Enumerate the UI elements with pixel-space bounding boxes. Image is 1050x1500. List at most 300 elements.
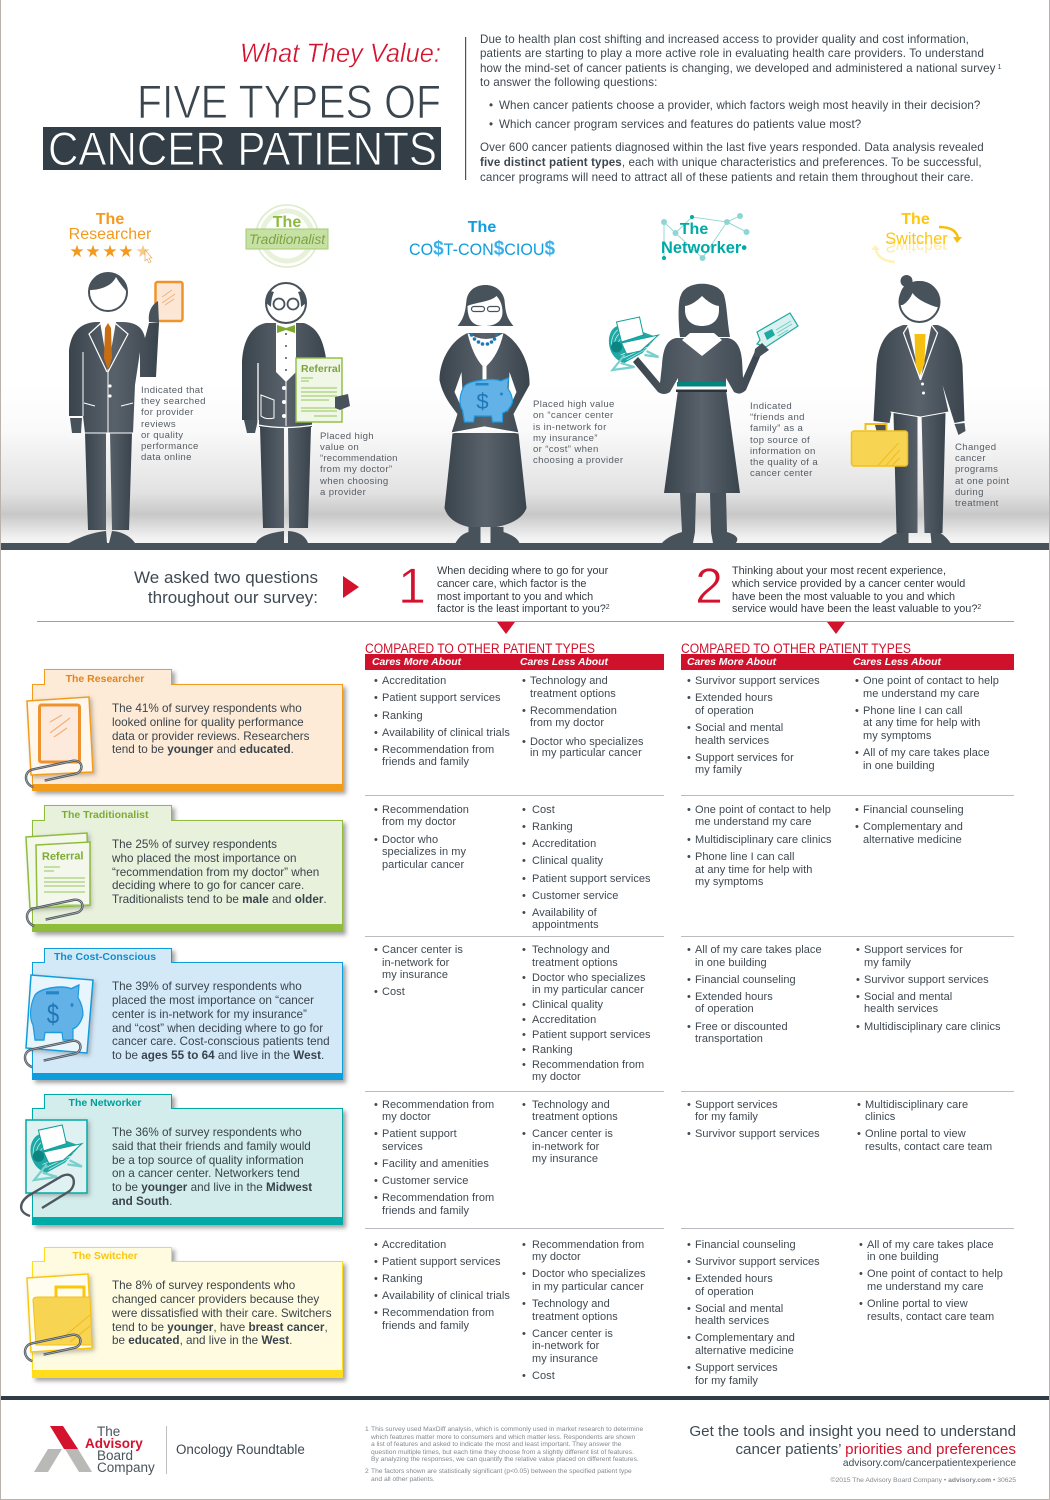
call to action: ©2015 The Advisory Board Company • advisory.com • 30625 (831, 1476, 1016, 1484)
list: switcher q2 less: • (859, 1239, 863, 1251)
intro text: five distinct patient types, each with unique characteristics and preferences. To be successful, (480, 156, 982, 169)
question 1: 1 (398, 558, 426, 614)
question 2: which service provided by a cancer center would (731, 578, 965, 590)
card text: researcher: The 41% of survey respondents who (112, 702, 302, 715)
list: cost-conscious q1 more: Cancer center is (382, 944, 463, 956)
description: switcher: treatment (955, 498, 999, 509)
list: traditionalist q1 less: • (522, 838, 526, 850)
list: traditionalist q2 more: One point of contact to help (695, 804, 831, 816)
list: traditionalist q1 more: • (374, 804, 378, 816)
card text: switcher: The 8% of survey respondents who (112, 1279, 296, 1292)
list: traditionalist q1 more: from my doctor (382, 816, 456, 828)
list: cost-conscious q1 less: • (522, 972, 526, 984)
card shape: cost-conscious (32, 948, 343, 1080)
list: switcher q1 less: • (522, 1298, 526, 1310)
list: traditionalist q1 more: particular cancer (382, 859, 464, 871)
logo: the advisory board company: Advisory (85, 1436, 143, 1451)
list: switcher q1 less: Doctor who specializes (532, 1268, 646, 1280)
list: cost-conscious q1 less: Clinical quality (532, 999, 604, 1011)
list: networker q2 less: • (857, 1128, 861, 1140)
list: traditionalist q2 less: alternative medicine (863, 834, 962, 846)
description: networker: information on (750, 446, 816, 457)
list: traditionalist q1 more: specializes in my (382, 846, 466, 858)
list: researcher q2 more: • (687, 692, 691, 704)
description: traditionalist: from my doctor” (320, 464, 392, 475)
floor bar (1, 543, 1049, 550)
list: traditionalist q1 less (522, 804, 651, 931)
list: switcher q1 less: • (522, 1239, 526, 1251)
list: traditionalist q2 less: • (855, 804, 859, 816)
list: networker q2 less: Online portal to view (865, 1128, 966, 1140)
logo: the advisory board company: Company (97, 1460, 155, 1475)
card text: researcher: looked online for quality performance (112, 716, 304, 729)
list: networker q2 more (687, 1099, 820, 1140)
list: researcher q1 more: Patient support services (382, 692, 501, 704)
description: cost-conscious: is in-network for (533, 422, 607, 433)
intro text: Due to health plan cost shifting and increased access to provider quality and cost information, (480, 33, 969, 46)
list: researcher q2 more: Social and mental (695, 722, 783, 734)
persona heading: traditionalist (246, 205, 328, 267)
description: researcher (141, 385, 206, 463)
list: traditionalist q1 less: Availability of (532, 907, 598, 919)
list: researcher q2 less: One point of contact to help (863, 675, 999, 687)
list: switcher q1 more: • (374, 1307, 378, 1319)
description: switcher: Changed (955, 442, 996, 453)
list: researcher q1 more: • (374, 727, 378, 739)
list: cost-conscious q1 less: my doctor (532, 1071, 581, 1083)
panel: the researcher (26, 670, 343, 791)
icon: referral with paper clip: Referral (42, 850, 84, 863)
list: traditionalist q2 more: • (687, 834, 691, 846)
card text: cost-conscious (112, 980, 330, 1062)
list: switcher q2 more: Extended hours (695, 1273, 773, 1285)
list: networker q1 less: • (522, 1128, 526, 1140)
description: traditionalist: when choosing (319, 476, 389, 487)
card text: cost-conscious: placed the most importance on “cancer (112, 994, 314, 1007)
list: networker q2 more: • (687, 1099, 691, 1111)
list: switcher q2 more: for my family (695, 1375, 758, 1387)
list: cost-conscious q2 more: • (687, 1021, 691, 1033)
title: FIVE TYPES OF (137, 75, 441, 128)
table header: question 2: Cares More About (687, 657, 777, 668)
list: networker q1 more: • (374, 1175, 378, 1187)
card text: networker: be a top source of quality information (112, 1154, 304, 1167)
list: cost-conscious q1 less: • (522, 1059, 526, 1071)
persona heading: switcher: Switcher (885, 230, 948, 248)
list: researcher q1 less: in my particular cancer (530, 747, 642, 759)
list: switcher q1 more: friends and family (382, 1320, 470, 1332)
list: cost-conscious q1 less: • (522, 1014, 526, 1026)
description: researcher: performance (141, 441, 199, 452)
question 1 (398, 558, 610, 615)
list: switcher q2 more: Financial counseling (695, 1239, 796, 1251)
persona heading: cost-conscious: The (468, 219, 496, 236)
card text: switcher: be educated, and live in the West. (112, 1334, 292, 1347)
list: networker q2 less: results, contact care team (865, 1141, 992, 1153)
list: switcher q2 more: • (687, 1273, 691, 1285)
card text: cost-conscious: The 39% of survey respondents who (112, 980, 302, 993)
list: traditionalist q1 less: Patient support services (532, 873, 651, 885)
list: researcher q2 more: my family (695, 764, 742, 776)
description: networker: family” as a (750, 423, 804, 434)
list: traditionalist q2 more: at any time for help with (695, 864, 812, 876)
list: switcher q1 less: • (522, 1268, 526, 1280)
list: cost-conscious q1 more: in-network for (382, 957, 450, 969)
card tab label: networker: The Networker (69, 1097, 141, 1109)
intro text: • (489, 99, 493, 112)
list: networker q1 less: my insurance (532, 1153, 598, 1165)
list: switcher q1 less: in-network for (532, 1340, 600, 1352)
list: cost-conscious q2 less: Social and mental (864, 991, 952, 1003)
list: researcher q1 more: • (374, 710, 378, 722)
list: switcher q1 more: • (374, 1290, 378, 1302)
list: cost-conscious q2 less: • (856, 1021, 860, 1033)
list: researcher q1 more: Ranking (382, 710, 423, 722)
list: cost-conscious q1 less (522, 944, 651, 1083)
intro text: cancer programs will need to attract all of these patients and retain them throughout their care. (480, 171, 974, 184)
description: cost-conscious: or “cost” when (533, 444, 599, 455)
panel: the cost-conscious (25, 948, 343, 1080)
description: networker: the quality of a (750, 457, 818, 468)
card text: networker: and South. (112, 1195, 172, 1208)
list: switcher q1 less: treatment options (532, 1311, 618, 1323)
card text: networker: on a cancer center. Networkers tend (112, 1167, 300, 1180)
intro text: to answer the following questions: (480, 76, 657, 89)
list: researcher q1 less: from my doctor (530, 717, 604, 729)
list: traditionalist q1 less: • (522, 907, 526, 919)
intro text: 1 (996, 64, 1002, 71)
description: cost-conscious: my insurance” (533, 433, 598, 444)
list: researcher q2 less: my symptoms (863, 730, 932, 742)
list: networker q2 more: Survivor support services (695, 1128, 820, 1140)
list: switcher q2 less: All of my care takes place (867, 1239, 994, 1251)
title: What They Value: (240, 38, 441, 68)
list: switcher q1 more: Recommendation from (382, 1307, 494, 1319)
list: switcher q2 more: • (687, 1332, 691, 1344)
list: switcher q2 more: Complementary and (695, 1332, 795, 1344)
survey question intro: throughout our survey: (148, 588, 318, 607)
list: researcher q1 less: treatment options (530, 688, 616, 700)
list: switcher q2 more: alternative medicine (695, 1345, 794, 1357)
figure: traditionalist (242, 283, 350, 543)
description: cost-conscious: on “cancer center (533, 410, 614, 421)
list: switcher q2 less: • (859, 1268, 863, 1280)
persona heading: researcher: ★ (69, 242, 85, 261)
call to action: advisory.com/cancerpatientexperience (843, 1458, 1016, 1469)
card text: networker: The 36% of survey respondents who (112, 1126, 302, 1139)
list: traditionalist q1 more: Recommendation (382, 804, 469, 816)
list: cost-conscious q1 less: • (522, 944, 526, 956)
list: researcher q2 more: health services (695, 735, 770, 747)
list: switcher q1 more: Patient support services (382, 1256, 501, 1268)
list: switcher q1 more (374, 1239, 510, 1332)
list: cost-conscious q2 less (856, 944, 1001, 1033)
card tab label: cost-conscious: The Cost-Conscious (54, 951, 156, 963)
list: networker q1 less: • (522, 1099, 526, 1111)
description: cost-conscious: Placed high value (533, 399, 615, 410)
panel: the switcher (25, 1248, 343, 1378)
footnotes: This survey used MaxDiff analysis, which is commonly used in market research to determine (371, 1426, 643, 1433)
list: networker q1 more: Facility and amenities (382, 1158, 489, 1170)
list: researcher q2 more: Survivor support services (695, 675, 820, 687)
card text: researcher: data or provider reviews. Researchers (112, 730, 310, 743)
card text: researcher: tend to be younger and educated. (112, 743, 294, 756)
floor gradient (1, 385, 1049, 543)
persona heading: switcher (871, 211, 962, 262)
list: traditionalist q2 more: my symptoms (695, 876, 764, 888)
list: traditionalist q2 more: Phone line I can call (695, 851, 795, 863)
list: researcher q2 more: Extended hours (695, 692, 773, 704)
list: cost-conscious q1 more: Cost (382, 986, 405, 998)
list: cost-conscious q2 more: • (687, 974, 691, 986)
list: switcher q2 more: • (687, 1303, 691, 1315)
description: switcher: at one point (955, 476, 1009, 487)
list: cost-conscious q1 less: Recommendation from (532, 1059, 644, 1071)
list: researcher q2 less: • (855, 705, 859, 717)
figure: traditionalist: Referral (301, 363, 341, 375)
list: researcher q2 more: • (687, 675, 691, 687)
list: researcher q2 less: • (855, 747, 859, 759)
list: traditionalist q2 more (687, 804, 832, 888)
list: researcher q1 less: • (522, 675, 526, 687)
list: cost-conscious q2 more: in one building (695, 957, 767, 969)
footnotes: 1 (365, 1426, 369, 1433)
icon: piggy bank with paper clip (25, 975, 93, 1067)
question 1: 2 (606, 604, 610, 611)
intro text: patients are starting to play a more active role in evaluating health care providers. To understand (480, 47, 984, 60)
description: traditionalist: “recommendation (320, 453, 398, 464)
list: cost-conscious q2 more (687, 944, 822, 1045)
card text: cost-conscious: and “cost” when deciding where to go for (112, 1022, 323, 1035)
list: cost-conscious q2 more: All of my care takes place (695, 944, 822, 956)
list: traditionalist q2 less: Financial counseling (863, 804, 964, 816)
list: cost-conscious q2 less: Support services for (864, 944, 963, 956)
list: cost-conscious q2 more: • (687, 991, 691, 1003)
list: traditionalist q1 more: • (374, 834, 378, 846)
persona heading: researcher: ★ (135, 242, 151, 261)
list: traditionalist q1 more (374, 804, 469, 871)
list: switcher q1 more: • (374, 1256, 378, 1268)
list: cost-conscious q1 less: in my particular cancer (532, 984, 644, 996)
table header: question 2: COMPARED TO OTHER PATIENT TYPES (681, 641, 911, 656)
list: cost-conscious q2 less: my family (864, 957, 911, 969)
list: cost-conscious q2 less: Multidisciplinary care clinics (864, 1021, 1001, 1033)
description: cost-conscious: choosing a provider (533, 455, 624, 466)
intro text: When cancer patients choose a provider, which factors weigh most heavily in their decision? (499, 99, 981, 112)
list: cost-conscious q2 less: health services (864, 1003, 939, 1015)
footnotes: and all other patients. (371, 1476, 435, 1483)
list: networker q1 less: Technology and (532, 1099, 610, 1111)
description: networker (750, 401, 818, 479)
list: switcher q2 less: in one building (867, 1251, 939, 1263)
list: traditionalist q1 less: • (522, 890, 526, 902)
call to action (689, 1423, 1016, 1484)
arrow: question 1 down (497, 622, 515, 634)
list: researcher q2 less (855, 675, 999, 772)
card shape: switcher (32, 1248, 343, 1378)
question 2: 2 (695, 558, 723, 614)
arrow: question 2 down (827, 622, 845, 634)
list: networker q2 less: clinics (865, 1111, 896, 1123)
list: cost-conscious q1 less: • (522, 1029, 526, 1041)
list: switcher q2 more: • (687, 1256, 691, 1268)
list: switcher q1 less: Recommendation from (532, 1239, 644, 1251)
list: cost-conscious q1 more: • (374, 944, 378, 956)
list: traditionalist q1 less: Customer service (532, 890, 618, 902)
card text: traditionalist: who placed the most importance on (111, 852, 297, 865)
card text: traditionalist: The 25% of survey respondents (112, 838, 277, 851)
footer rule (1, 1396, 1049, 1400)
table header: question 1: Cares Less About (520, 657, 608, 668)
question 1: When deciding where to go for your (437, 565, 609, 577)
list: cost-conscious q1 less: treatment options (532, 957, 618, 969)
list: networker q1 less: treatment options (532, 1111, 618, 1123)
list: cost-conscious q1 more (374, 944, 463, 998)
intro text: Over 600 cancer patients diagnosed within the last five years responded. Data analysis revealed (480, 141, 984, 154)
list: switcher q1 more: Accreditation (382, 1239, 446, 1251)
icon: tablet with paper clip (26, 697, 93, 787)
list: switcher q2 less (859, 1239, 1003, 1323)
list: switcher q1 less: Technology and (532, 1298, 610, 1310)
list: researcher q1 more: Accreditation (382, 675, 446, 687)
question 1: most important to you and which (437, 591, 593, 603)
list: researcher q1 more: • (374, 692, 378, 704)
description: networker: “friends and (750, 412, 805, 423)
card tab label: traditionalist: The Traditionalist (62, 809, 149, 821)
list: networker q1 more: Recommendation from (382, 1099, 494, 1111)
list: researcher q1 more: • (374, 744, 378, 756)
list: networker q1 more (374, 1099, 494, 1217)
persona heading: researcher: ★ (118, 242, 134, 261)
icon: rolodex with paper clip (21, 1120, 87, 1216)
description: researcher: or quality (141, 430, 183, 441)
list: networker q1 less: in-network for (532, 1141, 600, 1153)
list: switcher q1 less: • (522, 1328, 526, 1340)
list: networker q2 more: Support services (695, 1099, 778, 1111)
list: researcher q1 less: Recommendation (530, 705, 617, 717)
card tab label: switcher: The Switcher (72, 1250, 138, 1262)
list: researcher q2 more: • (687, 722, 691, 734)
description: traditionalist: value on (320, 442, 359, 453)
description: networker: top source of (750, 435, 810, 446)
figure: networker (609, 284, 798, 543)
list: networker q1 more: Patient support (382, 1128, 457, 1140)
persona heading: traditionalist: The (273, 214, 301, 231)
title: CANCER PATIENTS (48, 122, 437, 175)
list: cost-conscious q2 less: Survivor support services (864, 974, 989, 986)
list: traditionalist q1 less: • (522, 821, 526, 833)
list: researcher q1 less: • (522, 736, 526, 748)
row dividers (365, 795, 1014, 1229)
intro text (480, 33, 1002, 184)
footnotes: question multiple times, but each time they choose from a slightly different list of features. (371, 1449, 634, 1456)
list: networker q2 more: for my family (695, 1111, 758, 1123)
card text: cost-conscious: center is in-network for my insurance” (112, 1008, 307, 1021)
list: switcher q1 less: in my particular cancer (532, 1281, 644, 1293)
persona: the researcher (69, 211, 206, 543)
description: traditionalist (319, 431, 398, 498)
card text: traditionalist: deciding where to go for cancer care. (112, 879, 304, 892)
list: researcher q2 more: Support services for (695, 752, 794, 764)
footnotes: By analyzing the responses, we can quantify the relative value placed on different features. (371, 1456, 639, 1463)
card text: traditionalist: “recommendation from my doctor” when (112, 866, 319, 879)
list: cost-conscious q1 less: Accreditation (532, 1014, 596, 1026)
list: traditionalist q2 less (855, 804, 964, 846)
list: researcher q2 less: in one building (863, 760, 935, 772)
list: traditionalist q2 more: • (687, 804, 691, 816)
list: switcher q2 more: • (687, 1239, 691, 1251)
list: switcher q1 more: • (374, 1273, 378, 1285)
description: researcher: they searched (141, 396, 206, 407)
list: researcher q2 more: of operation (695, 705, 754, 717)
list: networker q1 more: • (374, 1158, 378, 1170)
list: networker q2 less (857, 1099, 992, 1153)
persona: the networker (609, 213, 818, 543)
footnotes (365, 1426, 643, 1483)
list: networker q2 more: • (687, 1128, 691, 1140)
list: switcher q1 more: Availability of clinical trials (382, 1290, 510, 1302)
list: switcher q1 less (522, 1239, 646, 1382)
persona heading: cost-conscious (409, 219, 555, 260)
call to action: cancer patients’ priorities and preferences (735, 1441, 1016, 1458)
list: networker q1 more: friends and family (382, 1205, 470, 1217)
description: switcher: during (955, 487, 984, 498)
card text: cost-conscious: to be ages 55 to 64 and live in the West. (112, 1049, 324, 1062)
list: switcher q2 more: • (687, 1362, 691, 1374)
panel: the networker (21, 1094, 343, 1225)
list: traditionalist q2 less: Complementary and (863, 821, 963, 833)
question 2: have been the most valuable to you and which (732, 591, 955, 603)
title divider (465, 37, 466, 180)
list: researcher q1 more: Recommendation from (382, 744, 494, 756)
list: switcher q2 more (687, 1239, 820, 1387)
list: traditionalist q1 less: • (522, 873, 526, 885)
description: researcher: for provider (141, 407, 194, 418)
card text: researcher (112, 702, 310, 756)
list: cost-conscious q1 less: • (522, 1044, 526, 1056)
description: networker: cancer center (750, 468, 813, 479)
list: switcher q1 more: Ranking (382, 1273, 423, 1285)
list: networker q1 more: Customer service (382, 1175, 468, 1187)
persona heading: networker: Networker• (661, 238, 747, 257)
list: switcher q2 more: Survivor support services (695, 1256, 820, 1268)
description: cost-conscious (533, 399, 624, 466)
figure: switcher (852, 275, 966, 543)
list: cost-conscious q2 more: • (687, 944, 691, 956)
card text: switcher: tend to be younger, have breast cancer, (112, 1321, 328, 1334)
persona heading: researcher: ★ (85, 242, 101, 261)
table header: question 1: COMPARED TO OTHER PATIENT TYPES (365, 641, 595, 656)
panel: the traditionalist (26, 806, 343, 932)
list: networker q1 less: Cancer center is (532, 1128, 613, 1140)
list: traditionalist q1 less: Cost (532, 804, 555, 816)
description: traditionalist: a provider (320, 487, 367, 498)
list: researcher q1 more: Availability of clinical trials (382, 727, 510, 739)
logo: the advisory board company: The (97, 1424, 120, 1439)
card text: networker (112, 1126, 312, 1208)
description: networker: Indicated (750, 401, 792, 412)
persona heading: networker: The (680, 221, 708, 238)
list: traditionalist q2 more: me understand my care (695, 816, 812, 828)
description: switcher: programs (955, 464, 998, 475)
list: cost-conscious q1 less: Patient support services (532, 1029, 651, 1041)
list: switcher q1 less: Cancer center is (532, 1328, 613, 1340)
list: networker q1 more: • (374, 1192, 378, 1204)
list: cost-conscious q2 more: transportation (695, 1033, 763, 1045)
list: traditionalist q1 less: Accreditation (532, 838, 596, 850)
list: researcher q1 more (374, 675, 510, 768)
card text: switcher: were dissatisfied with their care. Switchers (111, 1307, 332, 1320)
